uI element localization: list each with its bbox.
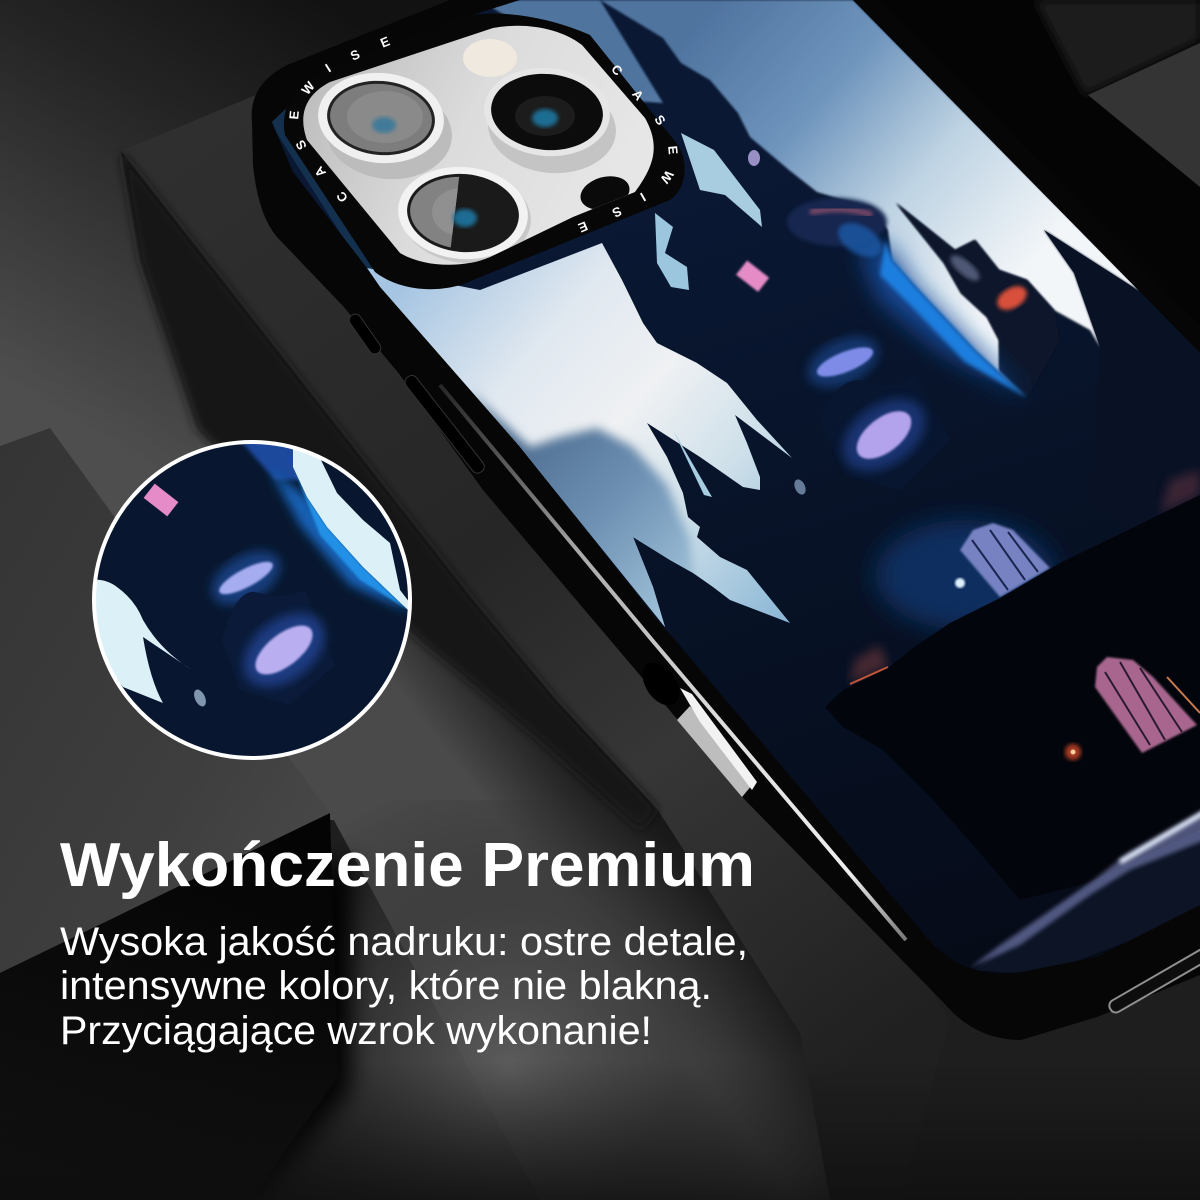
sky lobe left (360, 230, 800, 640)
spire light sliver (673, 430, 712, 497)
brand lettering: E (576, 218, 590, 236)
front face shadow (121, 151, 658, 830)
microphone dot (577, 171, 633, 215)
small emblem (192, 688, 208, 708)
arch silhouette (222, 590, 335, 705)
brand lettering: W (657, 168, 677, 187)
lower window glow (229, 598, 339, 702)
flash (463, 39, 517, 77)
pink sign in circle (144, 484, 178, 516)
printed artwork: gothic castle (260, 0, 1200, 990)
dome (787, 198, 887, 246)
brand lettering: C (333, 188, 351, 205)
tower blue light edge (880, 240, 1027, 398)
zoom detail circle (90, 440, 420, 760)
lower dark silhouette (825, 495, 1200, 900)
brand lettering: S (651, 112, 669, 128)
blue light edge (293, 467, 408, 610)
red wall far right (1160, 470, 1200, 513)
lower block front (0, 813, 338, 1200)
brand lettering (286, 33, 681, 236)
red glow (850, 645, 888, 683)
blue light glow (270, 470, 410, 612)
pink window lead lines (1105, 662, 1182, 745)
blue print sliver (272, 110, 373, 274)
brand lettering: S (348, 46, 362, 64)
brand lettering: C (608, 62, 626, 79)
dark tower with red light (896, 203, 1060, 398)
brand lettering: I (322, 61, 334, 75)
lens left (314, 68, 456, 184)
ground plane (976, 842, 1200, 973)
orange ember line (850, 667, 888, 684)
circle artwork (90, 440, 420, 760)
small tower highlights (948, 253, 982, 283)
bottom shading (0, 1060, 1200, 1200)
far block top (1088, 43, 1200, 187)
dome pink rim (810, 209, 872, 215)
case body (252, 0, 1200, 1040)
lens bottom (394, 162, 535, 268)
cloud (470, 390, 700, 640)
glass window (303, 26, 654, 265)
tower blue glow (860, 245, 1027, 398)
case glossy rim highlight (440, 385, 906, 940)
window lead lines (972, 530, 1038, 590)
brand lettering: E (378, 33, 392, 51)
brand lettering: S (610, 203, 624, 221)
side button small (347, 312, 383, 356)
description text: intensywne kolory, które nie blakną. (60, 964, 712, 1008)
blue stained window (960, 523, 1050, 597)
charging port (1107, 943, 1200, 1015)
pink sign (736, 261, 769, 292)
upper window (802, 332, 884, 392)
phone in case (252, 0, 1200, 1040)
top right darkness (860, 0, 1200, 360)
circle sky left (90, 580, 192, 703)
bright lamp (955, 578, 965, 588)
description text: Wysoka jakość nadruku: ostre detale, (60, 920, 748, 964)
main block front face (121, 151, 830, 1200)
lower block top (0, 428, 330, 973)
circle border (94, 442, 410, 758)
brand lettering: W (298, 78, 318, 98)
lens right (480, 63, 620, 178)
arch silhouette (838, 380, 910, 490)
silver button bright strip (680, 688, 757, 790)
description text (60, 920, 748, 1053)
arched window (838, 394, 930, 476)
brand lettering: E (286, 110, 302, 120)
silver button plate (677, 706, 752, 797)
orange stripe (1167, 677, 1200, 713)
ground plane glow (970, 810, 1200, 968)
brand lettering: E (665, 145, 681, 155)
horizon bright line (1120, 812, 1200, 862)
camera components (314, 39, 633, 268)
main block top face (121, 92, 950, 1200)
side button long (403, 373, 487, 476)
brand lettering: I (638, 190, 648, 204)
brand lettering: A (629, 87, 647, 104)
camera island (284, 13, 685, 289)
sky shard small (655, 213, 689, 290)
small arched window (748, 150, 760, 166)
heading: Wykończenie Premium (60, 831, 755, 900)
night castle base (260, 0, 1200, 990)
lower blue glow (875, 520, 1055, 630)
lower block cast shadow (150, 860, 352, 1200)
island outer frame (284, 13, 685, 289)
top blue patch (240, 440, 300, 480)
brand lettering: S (292, 137, 310, 153)
brand lettering: A (311, 163, 329, 180)
tall dark spire right (1044, 230, 1149, 348)
emblem (794, 479, 806, 495)
red tower light (994, 282, 1030, 314)
orange lamp (1065, 744, 1081, 760)
floor spotlight (200, 800, 900, 1200)
top right glow (1035, 0, 1200, 95)
description text: Przyciągające wzrok wykonanie! (60, 1009, 652, 1053)
floor upper left (0, 0, 700, 820)
sky shard by camera (681, 133, 762, 227)
pink stained glass window (1095, 657, 1197, 753)
dome blue drip (836, 220, 883, 259)
button dark slot (635, 656, 687, 712)
sky upper right (480, 0, 1140, 398)
circle sky right (293, 448, 410, 610)
upper window glow (202, 540, 290, 616)
